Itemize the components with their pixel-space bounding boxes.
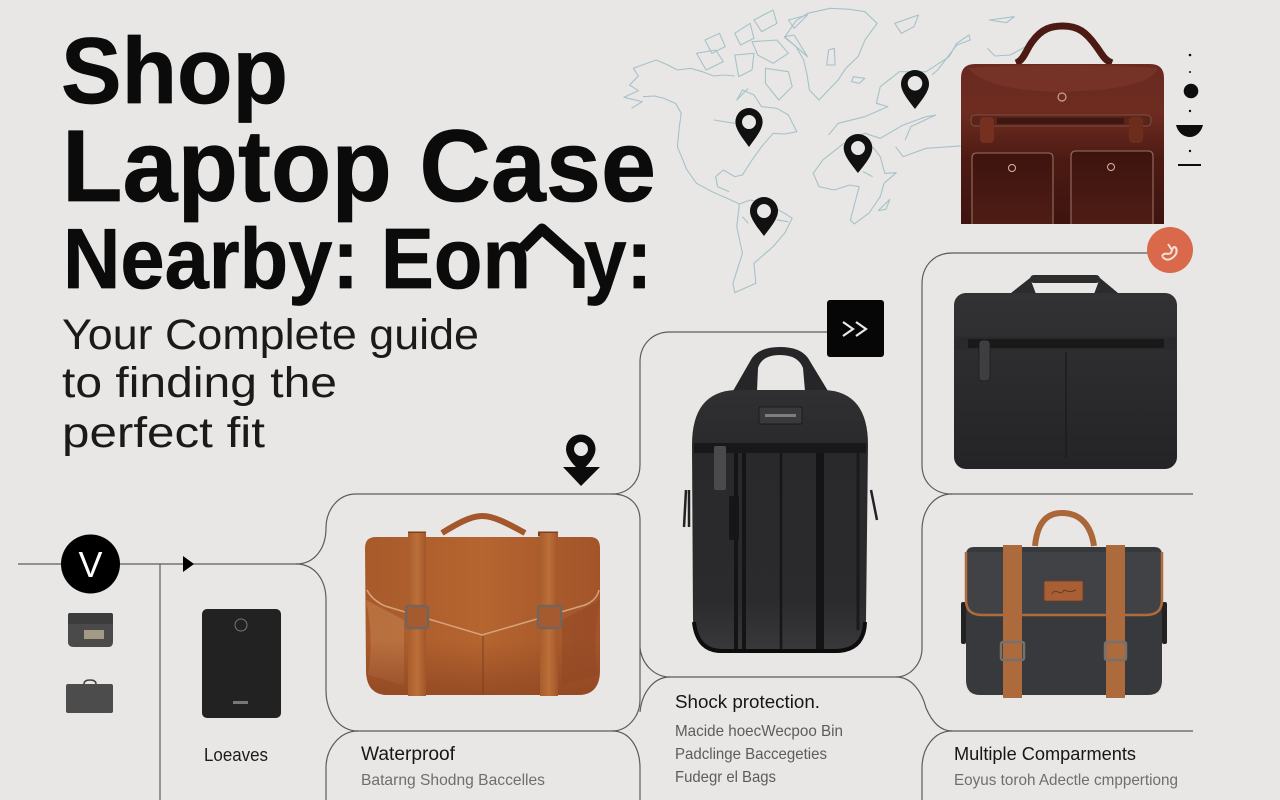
panel text: Shock protection: Macide hoecWecpoo Bin — [675, 723, 843, 740]
title: y: — [584, 212, 652, 307]
bag: dark red leather — [961, 26, 1164, 224]
panel text: Shock protection — [675, 692, 843, 786]
panel text: Multiple Compartments — [954, 744, 1178, 789]
panel text: Waterproof: Waterproof — [361, 744, 456, 765]
arrow: flow direction — [183, 556, 194, 572]
subtitle: Your Complete guide — [62, 311, 479, 359]
label: Loeaves: Loeaves — [204, 745, 268, 765]
panel text: Shock protection: Fudegr el Bags — [675, 769, 776, 786]
panel text: Waterproof — [361, 744, 545, 789]
bag: grey canvas with tan straps — [961, 513, 1167, 698]
title: Laptop Case — [62, 109, 656, 223]
bag: black backpack sleeve — [684, 347, 877, 653]
panel text: Waterproof: Batarng Shodng Baccelles — [361, 772, 545, 789]
map pin: North America — [735, 108, 763, 147]
title: Nearby: Eon — [63, 212, 531, 307]
subtitle — [62, 311, 479, 457]
panel text: Shock protection: Padclinge Baccegeties — [675, 746, 827, 763]
thumbnail: small grey bag — [68, 613, 113, 647]
panel text: Multiple Compartments: Eoyus toroh Adectle cmppertiong — [954, 772, 1178, 789]
thumbnail: small dark case — [66, 680, 113, 713]
tablet sleeve — [202, 609, 281, 718]
bag: tan leather briefcase — [365, 516, 600, 696]
bag: dark laptop case — [954, 275, 1177, 469]
icon: location pin with down arrow — [563, 434, 600, 486]
start marker V — [61, 534, 120, 594]
world map — [624, 8, 1026, 293]
subtitle: perfect fit — [62, 409, 265, 457]
map pin: Africa — [844, 134, 872, 173]
panel text: Shock protection: Shock protection. — [675, 692, 820, 712]
button: forward chevrons — [827, 300, 884, 357]
icon: orange badge — [1147, 227, 1193, 273]
subtitle: to finding the — [62, 359, 337, 407]
icon: decorative glyph column — [1176, 54, 1203, 166]
title — [61, 18, 656, 307]
panel text: Multiple Compartments: Multiple Comparments — [954, 744, 1136, 764]
map pin: South America — [750, 197, 778, 236]
start marker V: V — [78, 544, 103, 585]
connector lines — [18, 253, 1193, 800]
title: Shop — [61, 18, 288, 123]
map pin: Asia — [901, 70, 929, 109]
